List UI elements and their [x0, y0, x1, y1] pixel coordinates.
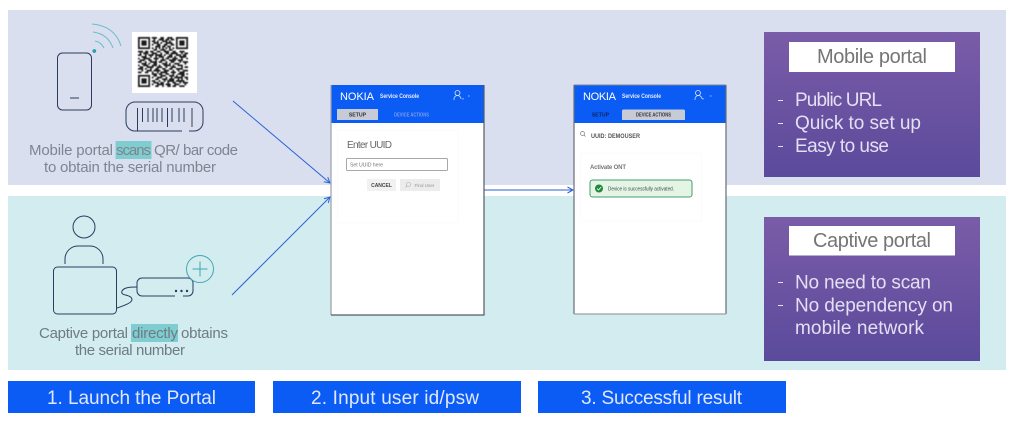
panel: Mobile portal benefits — [764, 32, 980, 177]
step 1 label: 1. Launch the Portal — [47, 388, 216, 409]
icon: user menu — [454, 90, 470, 100]
icon: user at laptop with router — [54, 216, 214, 314]
list: captive portal benefits: mobile network — [795, 318, 924, 339]
tab: DEVICE ACTIONS: DEVICE ACTIONS — [394, 113, 430, 119]
text: captive portal description: the serial number — [75, 342, 185, 359]
list: mobile portal benefits: Public URL — [795, 90, 882, 111]
step 3 label: 3. Successful result — [581, 388, 743, 409]
heading: Service Console: Service Console — [380, 94, 420, 100]
list: mobile portal benefits: Quick to set up — [795, 113, 921, 134]
arrow: mobile portal to input screen — [233, 101, 330, 183]
button: Find User: Find User — [414, 183, 435, 189]
panel: Captive portal benefits — [764, 217, 980, 361]
heading: Mobile portal: Mobile portal — [817, 46, 927, 68]
input: Set UUID here: Set UUID here — [350, 162, 383, 168]
button: CANCEL: CANCEL — [371, 183, 392, 189]
text: mobile portal description — [29, 141, 238, 176]
list: captive portal benefits: No dependency on — [795, 296, 953, 316]
tab: SETUP — [337, 109, 378, 120]
text: mobile portal description: Mobile portal — [29, 142, 113, 159]
list: captive portal benefits — [778, 272, 953, 339]
input: Set UUID here — [346, 158, 448, 170]
heading: Captive portal: Captive portal — [813, 230, 931, 252]
panel: Enter UUID screen — [331, 85, 484, 315]
icon: phone with wifi signal — [58, 24, 121, 110]
text: mobile portal description: to obtain the serial number — [44, 159, 216, 176]
icon: QR code — [132, 32, 197, 93]
button: CANCEL — [367, 179, 396, 191]
icon: search — [580, 132, 586, 136]
tab: DEVICE ACTIONS — [622, 110, 685, 120]
card outline — [580, 153, 702, 221]
text: mobile portal description: scans — [116, 142, 151, 159]
status: device activated: Device is successfully activated. — [608, 186, 674, 192]
icon: bar code — [126, 102, 203, 131]
panel: captive portal band — [8, 196, 1006, 370]
tab: SETUP: SETUP — [349, 113, 367, 119]
heading: UUID DEMOUSER: UUID: DEMOUSER — [591, 134, 641, 140]
list: mobile portal benefits: Easy to use — [795, 136, 889, 157]
text: captive portal description: obtains — [181, 325, 228, 342]
step 1 label — [8, 381, 255, 413]
tab: DEVICE ACTIONS: DEVICE ACTIONS — [636, 113, 672, 119]
panel: success result screen — [574, 85, 726, 314]
text: mobile portal description: QR/ bar code — [154, 142, 238, 159]
arrow: input screen to result screen — [484, 189, 573, 191]
text: captive portal description: Captive portal — [39, 325, 128, 342]
step 2 label: 2. Input user id/psw — [311, 388, 479, 409]
heading: Service Console: Service Console — [622, 94, 662, 100]
panel: mobile portal band — [8, 10, 1006, 185]
heading: Mobile portal — [789, 42, 955, 72]
icon: user menu — [695, 90, 712, 100]
heading: Captive portal — [789, 226, 955, 256]
status: device activated — [590, 180, 692, 197]
heading: Activate ONT: Activate ONT — [590, 165, 626, 171]
text: captive portal description: directly — [132, 325, 178, 342]
logo: Nokia: NOKIA — [583, 91, 617, 103]
logo: Nokia: NOKIA — [340, 91, 375, 103]
step 2 label — [273, 381, 521, 413]
text: captive portal description — [39, 324, 228, 359]
arrow: captive portal to input screen — [232, 197, 330, 295]
card outline — [338, 130, 458, 223]
button: Find User — [400, 179, 440, 191]
step 3 label — [538, 381, 786, 413]
list: mobile portal benefits — [778, 90, 921, 157]
tab: SETUP: SETUP — [592, 113, 610, 119]
heading: Enter UUID: Enter UUID — [347, 140, 392, 151]
list: captive portal benefits: No need to scan — [795, 272, 931, 294]
